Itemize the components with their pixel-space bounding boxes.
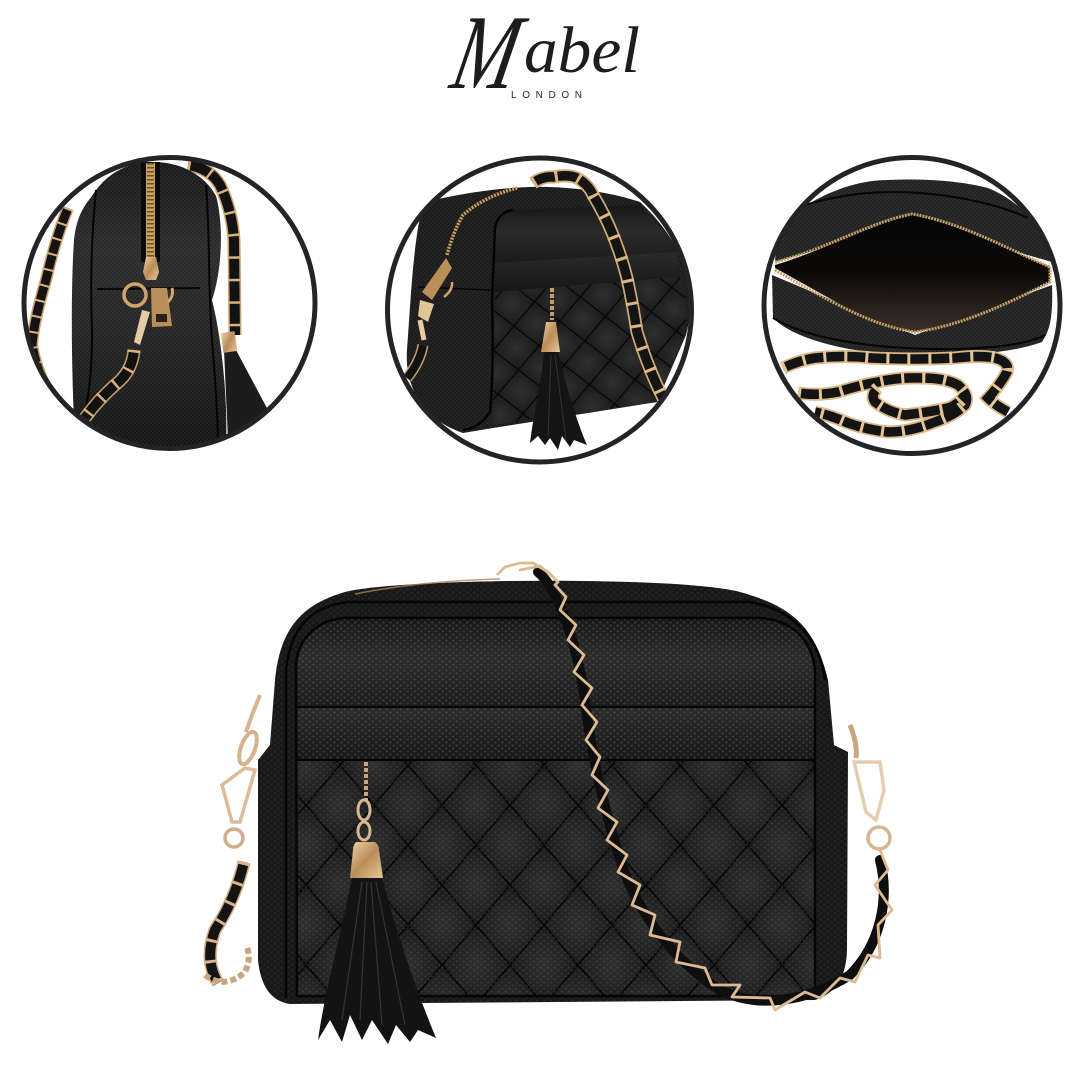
front upper panel: [495, 205, 677, 263]
open zipper: [775, 214, 1050, 332]
front shell: [772, 275, 1052, 356]
tassel: [221, 331, 268, 440]
tassel rings: [358, 800, 370, 840]
zipper teeth: [147, 163, 154, 262]
tassel: [318, 762, 436, 1044]
upper front panel: [296, 618, 815, 707]
quilted pocket: [296, 761, 815, 997]
tassel pull chain: [550, 288, 554, 320]
right hardware and strap: [850, 725, 890, 849]
rear shell: [775, 179, 1052, 262]
zipper pull hardware: [124, 257, 172, 345]
side seam: [418, 287, 490, 290]
tassel: [530, 322, 587, 450]
tassel cap: [350, 842, 383, 878]
left hardware and strap: [205, 695, 260, 983]
main product photo: quilted crossbody bag: [205, 563, 892, 1044]
left strap chain: [407, 345, 423, 378]
left strap chain: [32, 208, 68, 400]
shoulder strap chain links: [498, 563, 892, 1010]
shoulder strap leather: [538, 572, 884, 1001]
circle ring: [764, 158, 1060, 454]
horizontal band: [296, 707, 815, 760]
logo: Mabel London: [441, 0, 640, 112]
shoulder strap chain: [533, 176, 663, 398]
front band: [495, 252, 680, 292]
detail circle: open interior view: [764, 158, 1060, 454]
detail circle: three-quarter view: [388, 158, 692, 462]
zipper: [146, 163, 155, 263]
front panel piping: [463, 210, 513, 430]
tassel fringe: [318, 878, 436, 1044]
brand name remainder: abel: [524, 14, 640, 87]
top zipper: [355, 579, 500, 594]
body grain: [258, 581, 848, 1004]
tassel pull chain: [364, 762, 368, 800]
zipper: [447, 188, 517, 255]
bag body: [258, 581, 848, 1004]
brand location: LONDON: [511, 90, 585, 101]
circle ring: [388, 158, 692, 462]
strap chain coil: [783, 356, 1008, 432]
bag body: [407, 187, 690, 433]
bag side panel: [72, 162, 226, 455]
piping seams: [286, 602, 825, 998]
front strap chain: [85, 350, 134, 418]
bag interior lining: [775, 215, 1050, 332]
quilted pocket: [493, 277, 687, 425]
zipper pull hardware: [418, 258, 452, 340]
detail circle: side view with zipper: [24, 158, 315, 455]
circle ring: [24, 158, 315, 448]
right strap chain: [188, 165, 235, 335]
fringe strand lines: [342, 882, 405, 1025]
